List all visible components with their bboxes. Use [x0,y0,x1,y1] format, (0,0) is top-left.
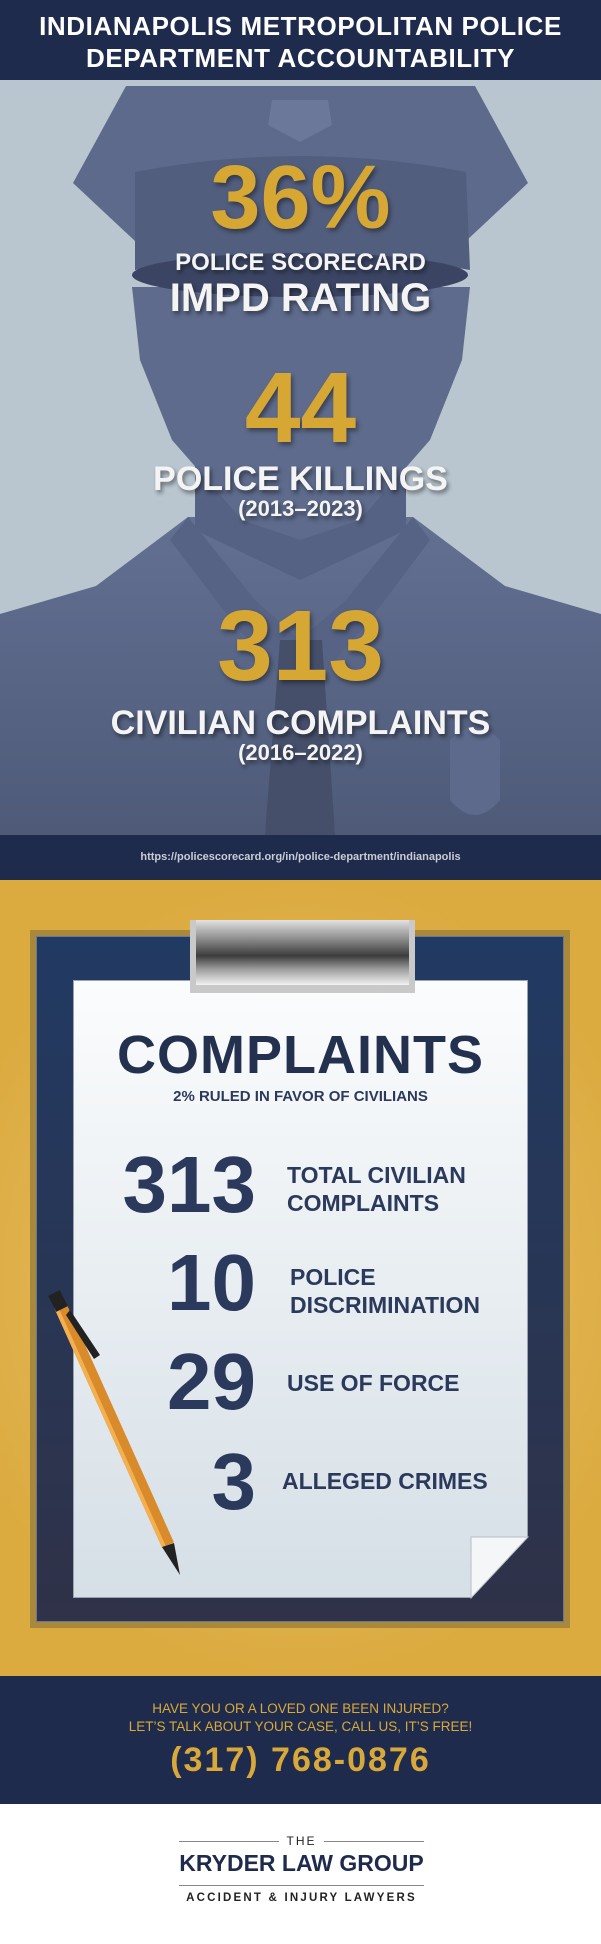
row: 313 total: 313 [123,1140,256,1229]
icon: paper curl [470,1536,529,1600]
clipboard frame [30,930,570,1628]
CTA text: LET’S TALK ABOUT YOUR CASE, CALL US, IT’S FREE! [129,1719,472,1734]
stat: 44: 44 [245,352,356,464]
row: 10 discrimination [167,1238,480,1327]
paper [73,980,528,1598]
stat: 36%: 36% [210,148,391,248]
stat label: civilian complaints: CIVILIAN COMPLAINTS [111,704,490,742]
title: INDIANAPOLIS METROPOLITAN POLICE [39,11,562,41]
gold background panel [0,880,601,1676]
row: 29 use of force [167,1337,460,1426]
stat label: police killings [153,460,451,525]
row: 10 discrimination: 10 [167,1238,256,1327]
logo: Kryder Law Group [179,1834,424,1904]
CTA text [129,1701,472,1734]
title [39,11,562,73]
stat label: police killings: (2013–2023) [238,496,363,521]
row: 29 use of force: USE OF FORCE [287,1370,460,1396]
row: 313 total: COMPLAINTS [287,1190,439,1216]
heading: complaints: COMPLAINTS [117,1025,484,1085]
subheading: 2% RULED IN FAVOR OF CIVILIANS [173,1088,428,1105]
logo: Kryder Law Group: KRYDER LAW GROUP [179,1850,424,1876]
phone number: (317) 768-0876 [170,1741,431,1779]
row: 3 alleged crimes [212,1437,488,1526]
stat label: civilian complaints [111,704,493,768]
source url: https://policescorecard.org/in/police-department/indianapolis [140,851,461,863]
stat: 313: 313 [217,590,384,702]
logo: Kryder Law Group: THE [286,1834,316,1848]
row: 10 discrimination: DISCRIMINATION [290,1292,480,1318]
row: 3 alleged crimes: ALLEGED CRIMES [282,1468,488,1494]
row: 29 use of force: 29 [167,1337,256,1426]
CTA text: HAVE YOU OR A LOVED ONE BEEN INJURED? [152,1701,449,1716]
CTA bar [0,1676,601,1804]
row: 3 alleged crimes: 3 [212,1437,256,1526]
row: 10 discrimination: POLICE [290,1264,376,1290]
stat label: police scorecard IMPD rating: POLICE SCORECARD [175,249,426,276]
icon: officer silhouette [0,86,601,835]
icon: clip [190,920,415,993]
icon: pen [48,1290,180,1575]
stat label: civilian complaints: (2016–2022) [238,740,363,765]
logo: Kryder Law Group: ACCIDENT & INJURY LAWYERS [186,1892,417,1904]
title: DEPARTMENT ACCOUNTABILITY [86,43,515,73]
source url bar [0,835,601,880]
header bar [0,0,601,80]
stat label: police scorecard IMPD rating [170,249,433,320]
row: 313 total [123,1140,466,1229]
stat label: police killings: POLICE KILLINGS [153,460,448,498]
list: complaint stats [123,1140,488,1526]
stat label: police scorecard IMPD rating: IMPD RATING [170,276,431,320]
hero panel: police silhouette [0,80,601,835]
row: 313 total: TOTAL CIVILIAN [287,1162,466,1188]
